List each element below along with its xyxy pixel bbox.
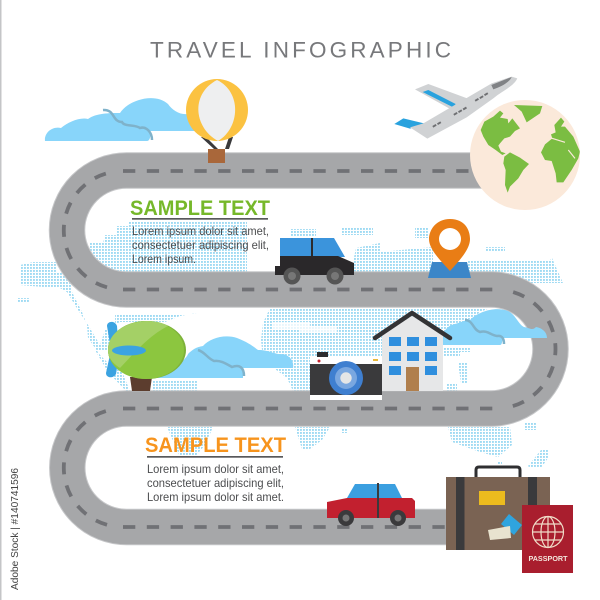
text block: lower lorem ipsum — [147, 462, 284, 504]
text block: upper lorem ipsum: Lorem ipsum. — [132, 252, 196, 266]
cloud: middle — [153, 336, 293, 378]
road — [64, 170, 555, 527]
red car — [327, 483, 415, 526]
globe — [470, 100, 580, 210]
text block: lower lorem ipsum: Lorem ipsum dolor sit amet. — [147, 490, 284, 504]
camera — [310, 352, 382, 400]
black car — [275, 238, 354, 284]
hot air balloon — [186, 79, 248, 163]
text block: upper lorem ipsum — [132, 224, 269, 266]
passport — [522, 505, 573, 573]
divider: green heading — [132, 218, 268, 220]
cloud: top left — [45, 98, 206, 141]
text block: lower lorem ipsum: Lorem ipsum dolor sit amet, — [147, 462, 284, 476]
title: TRAVEL INFOGRAPHIC — [150, 38, 451, 62]
stock credit: Adobe Stock | #140741596 — [9, 468, 21, 590]
location pin — [428, 219, 471, 278]
blimp — [106, 321, 186, 391]
text block: upper lorem ipsum: consectetuer adipiscing elit, — [132, 238, 269, 252]
cloud: right — [442, 309, 547, 345]
house — [375, 313, 450, 391]
passport: PASSPORT — [528, 554, 568, 563]
text block: upper lorem ipsum: Lorem ipsum dolor sit amet, — [132, 224, 269, 238]
suitcase — [446, 467, 550, 550]
heading: orange sample text: SAMPLE TEXT — [145, 434, 286, 457]
divider: orange heading — [147, 456, 283, 458]
text block: lower lorem ipsum: consectetuer adipiscing elit, — [147, 476, 284, 490]
heading: green sample text: SAMPLE TEXT — [130, 197, 270, 220]
airplane — [394, 77, 517, 139]
dotted world map — [17, 222, 563, 468]
